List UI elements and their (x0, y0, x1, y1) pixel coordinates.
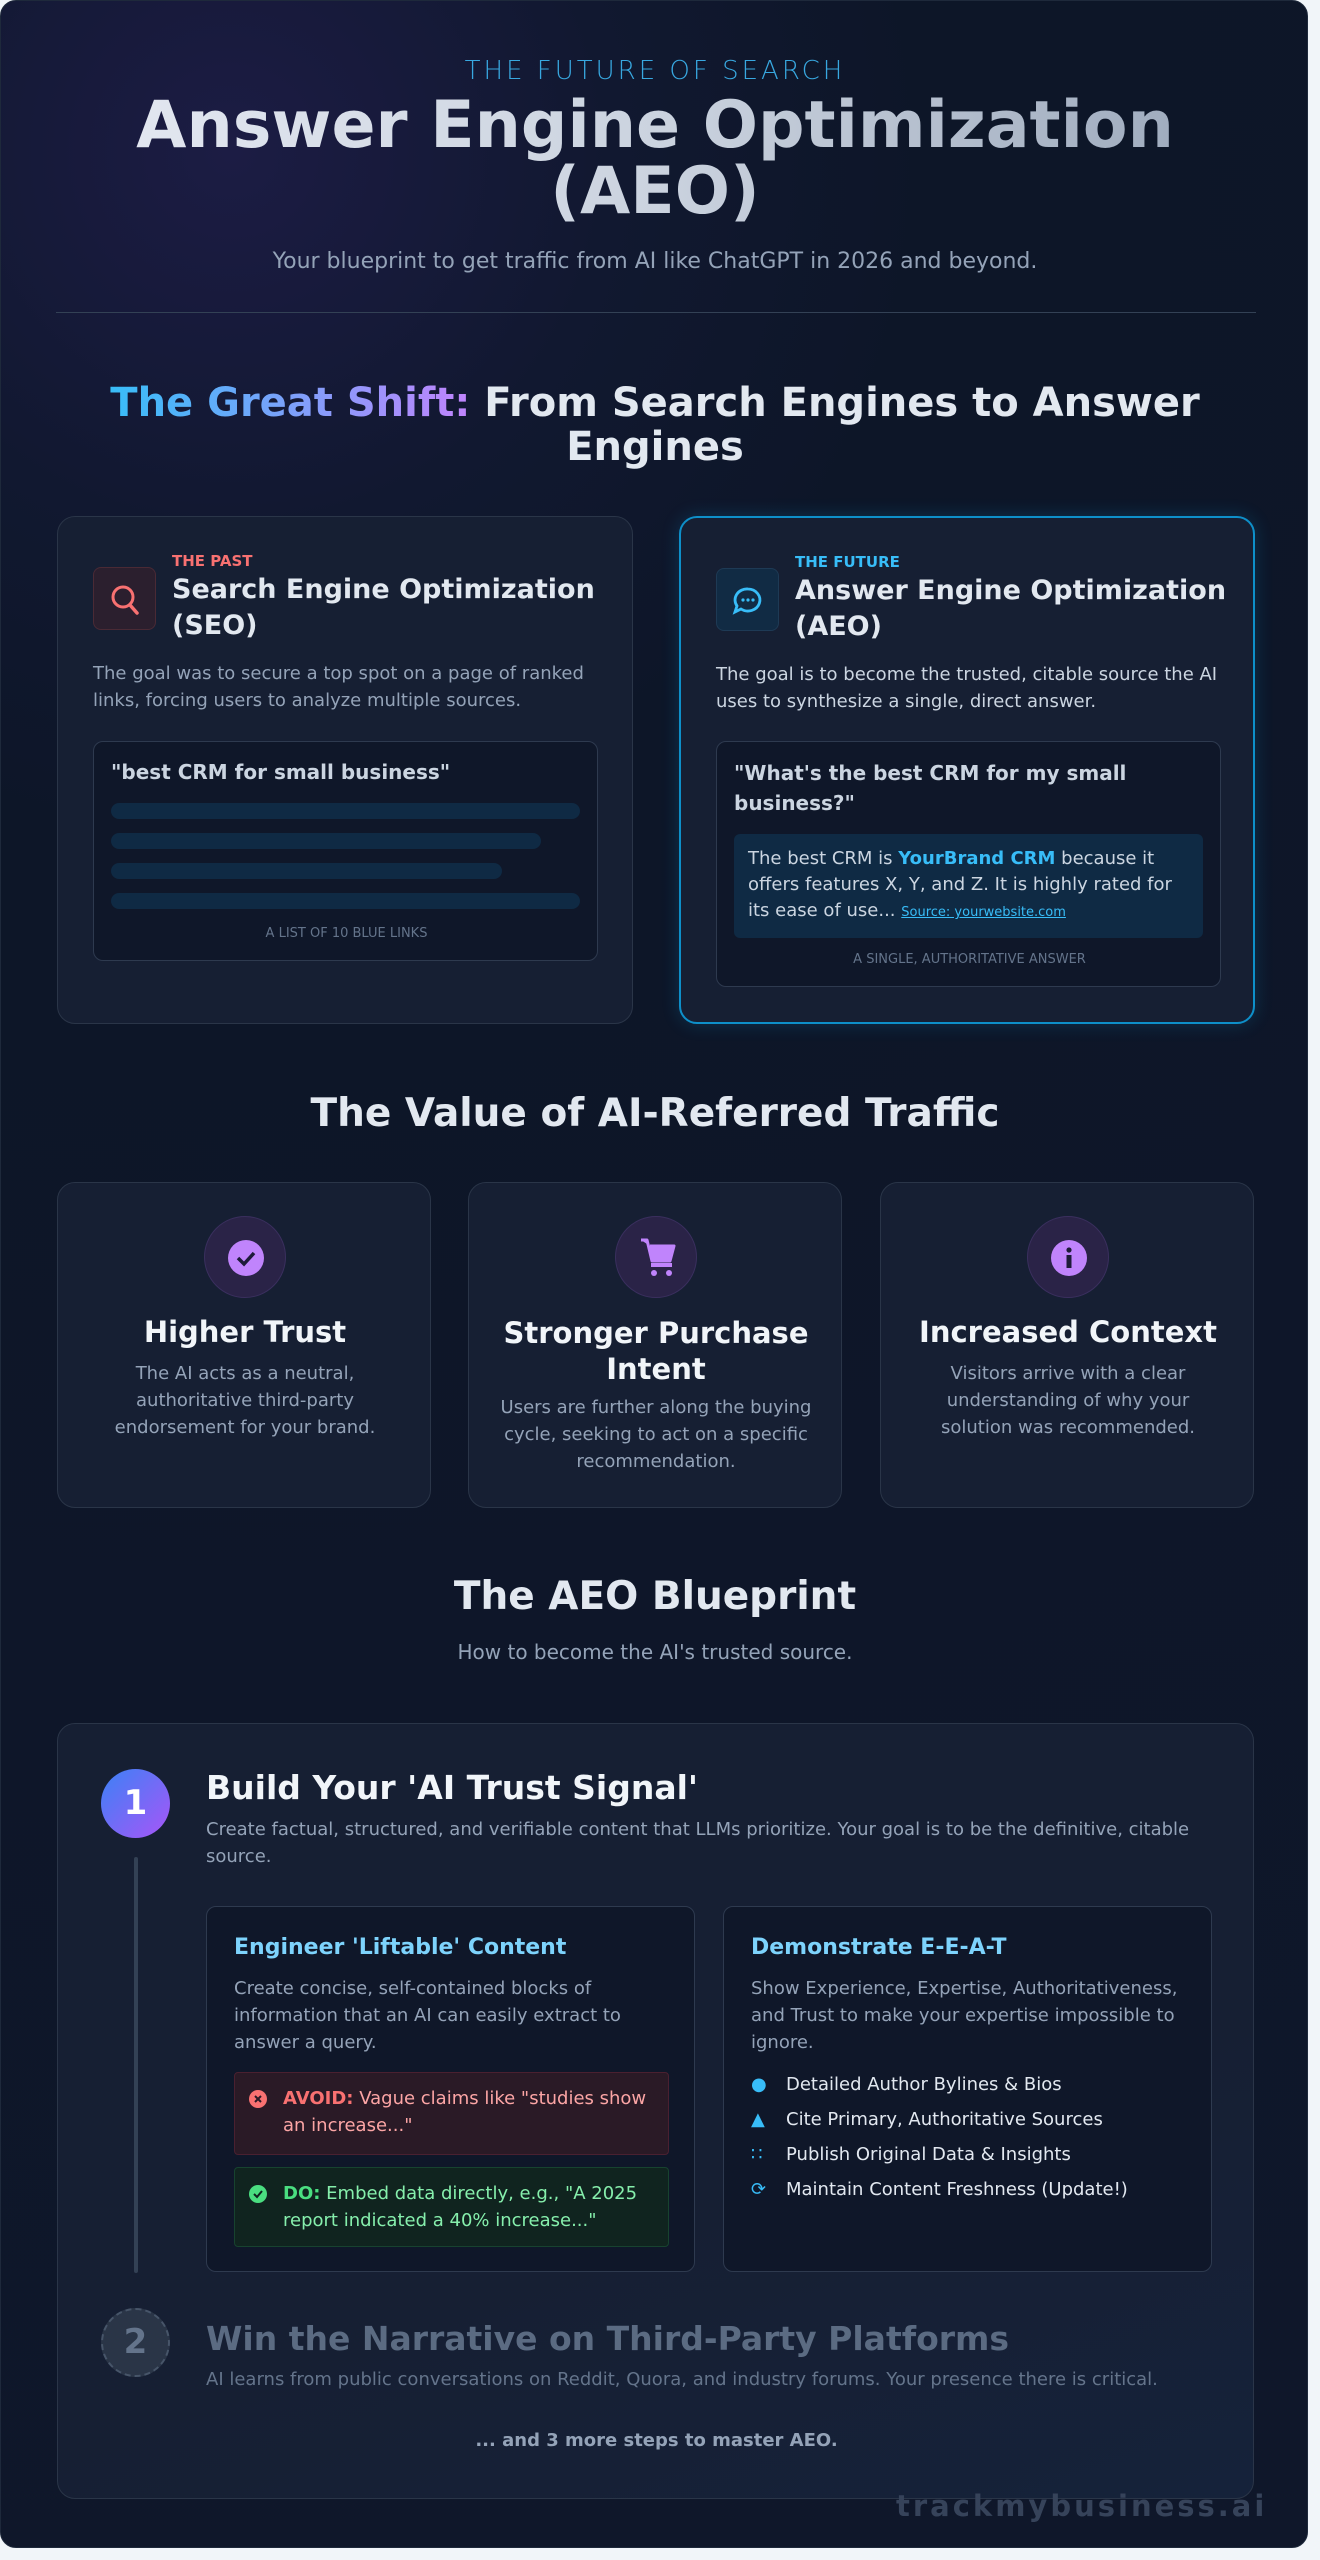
answer box (734, 834, 1203, 938)
step 1 description: Create factual, structured, and verifiable content that LLMs prioritize. Your goal is to be the definitive, citable source. (206, 1819, 1189, 1867)
icon: check (204, 1216, 286, 1298)
label: the past: THE PAST (172, 552, 253, 570)
description: The goal was to secure a top spot on a page of ranked links, forcing users to analyze multiple sources. (93, 663, 584, 711)
checklist (751, 2074, 1128, 2200)
icon: search (93, 567, 156, 630)
mock: single answer: A SINGLE, AUTHORITATIVE ANSWER (853, 952, 1086, 967)
step 1 badge (101, 1769, 170, 1838)
heading: value of AI-referred traffic: The Value of AI-Referred Traffic (311, 1091, 999, 1136)
checklist: Cite Primary, Authoritative Sources (786, 2109, 1103, 2130)
eyebrow: the future of search: THE FUTURE OF SEARCH (465, 56, 845, 86)
description: Show Experience, Expertise, Authoritativeness, and Trust to make your expertise impossible to ignore. (751, 1978, 1177, 2053)
mock: list of blue links: A LIST OF 10 BLUE LINKS (266, 926, 427, 941)
answer box: The best CRM is YourBrand CRM because it offers features X, Y, and Z. It is highly rated for its ease of use... Source: yourwebsite.com (748, 848, 1172, 921)
callout: avoid: AVOID: Vague claims like "studies show an increase..." (283, 2088, 646, 2136)
checklist: Detailed Author Bylines & Bios (786, 2074, 1062, 2095)
panel: blueprint steps (57, 1723, 1254, 2499)
heading: AEO blueprint: The AEO Blueprint (454, 1574, 856, 1619)
card title: Search Engine Optimization (SEO) (172, 574, 595, 641)
description: The AI acts as a neutral, authoritative third-party endorsement for your brand. (115, 1363, 375, 1438)
card: increased context (880, 1182, 1254, 1508)
sub-card: liftable content (206, 1906, 695, 2272)
mock: single answer: "What's the best CRM for my small business?" (734, 761, 1126, 815)
heading: the great shift: The Great Shift: From Search Engines to Answer Engines (110, 380, 1200, 470)
mock: list of blue links (93, 741, 598, 961)
panel: the past (SEO) (57, 516, 633, 1024)
mock: single answer (716, 741, 1221, 987)
checklist: ● (751, 2074, 767, 2095)
step 2 badge (101, 2308, 170, 2377)
step 1 title: Build Your 'AI Trust Signal' (206, 1768, 698, 1807)
icon: cart (615, 1216, 697, 1298)
step 1 badge: 1 (124, 1783, 147, 1823)
title: Increased Context (919, 1315, 1217, 1349)
card: higher trust (57, 1182, 431, 1508)
icon: chat bubble (716, 568, 779, 631)
description: Create concise, self-contained blocks of information that an AI can easily extract to answer a query. (234, 1978, 621, 2053)
title: Stronger Purchase Intent (504, 1316, 808, 1386)
callout: do: DO: Embed data directly, e.g., "A 2025 report indicated a 40% increase..." (283, 2183, 637, 2231)
footer note: ... and 3 more steps to master AEO. (475, 2430, 838, 2451)
card title: Answer Engine Optimization (AEO) (795, 575, 1226, 642)
panel: the future (AEO) (679, 516, 1255, 1024)
subheading: How to become the AI's trusted source. (458, 1640, 852, 1664)
description: The goal is to become the trusted, citable source the AI uses to synthesize a single, direct answer. (716, 664, 1217, 712)
checklist: ⟳ (751, 2179, 766, 2200)
callout: do (234, 2167, 669, 2247)
description: Users are further along the buying cycle, seeking to act on a specific recommendation. (501, 1397, 811, 1472)
checklist: ▲ (751, 2109, 765, 2130)
step 2 badge: 2 (124, 2322, 147, 2362)
description: Visitors arrive with a clear understanding of why your solution was recommended. (941, 1363, 1195, 1438)
icon: info (1027, 1216, 1109, 1298)
card: stronger purchase intent (468, 1182, 842, 1508)
mock: list of blue links: "best CRM for small business" (111, 760, 450, 784)
step 2 description: AI learns from public conversations on Reddit, Quora, and industry forums. Your presence there is critical. (206, 2369, 1158, 2390)
sub-card: E-E-A-T (723, 1906, 1212, 2272)
subtitle: Your blueprint to get traffic from AI like ChatGPT in 2026 and beyond. (273, 249, 1037, 274)
checklist: Maintain Content Freshness (Update!) (786, 2179, 1128, 2200)
label: the future: THE FUTURE (795, 553, 900, 571)
checklist: ∷ (751, 2144, 762, 2165)
title: Demonstrate E-E-A-T (751, 1935, 1007, 1960)
step 2 title: Win the Narrative on Third-Party Platforms (206, 2319, 1009, 2358)
title: Answer Engine Optimization (AEO) (136, 88, 1174, 229)
title: Higher Trust (144, 1315, 346, 1349)
watermark: trackmybusiness.ai (896, 2489, 1267, 2523)
checklist: Publish Original Data & Insights (786, 2144, 1071, 2165)
callout: avoid (234, 2072, 669, 2155)
title: Engineer 'Liftable' Content (234, 1935, 566, 1960)
